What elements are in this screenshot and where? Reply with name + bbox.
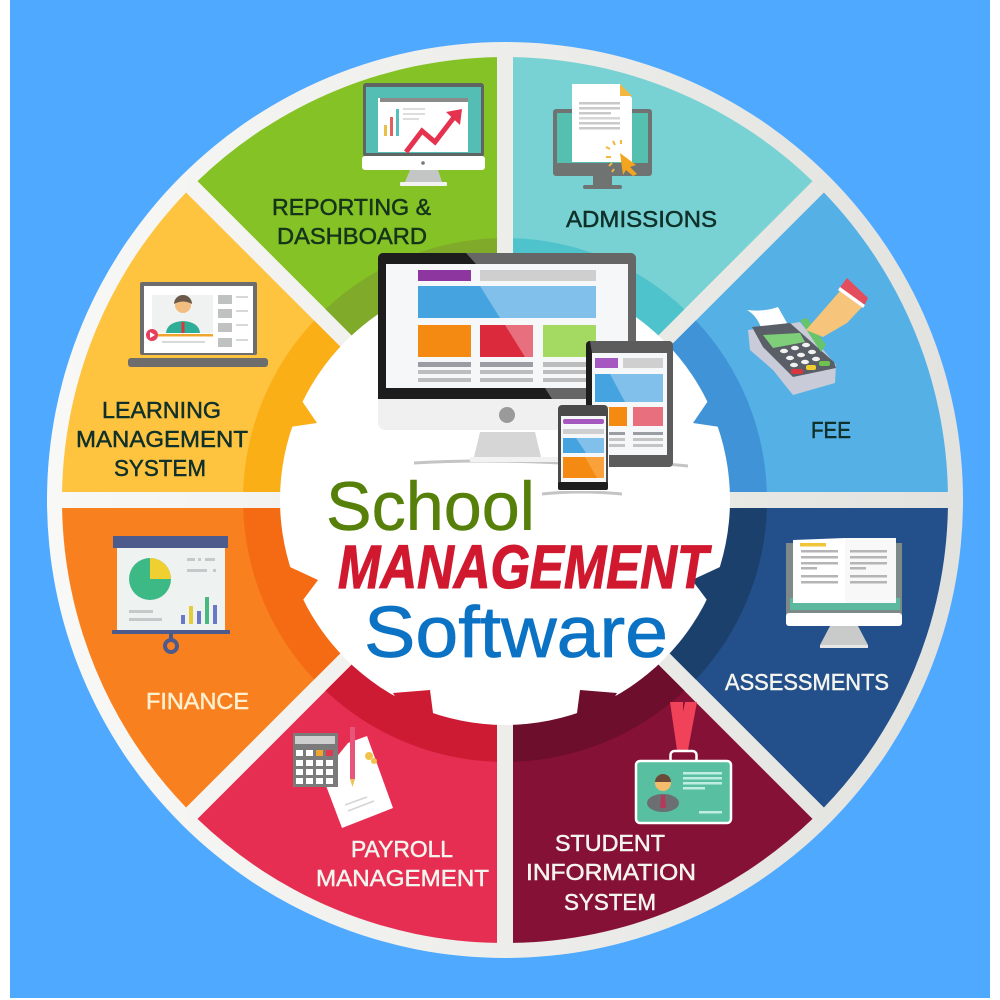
icon: ID card (636, 702, 731, 823)
icon: responsive devices (378, 253, 688, 494)
icon: admissions monitor and form (553, 84, 652, 189)
label: payroll management: PAYROLL (351, 836, 453, 862)
icon: reporting monitor (362, 83, 485, 186)
panel: finance (62, 508, 486, 808)
label: payroll management: MANAGEMENT (316, 865, 489, 891)
label: learning management system: LEARNING (102, 397, 221, 423)
icon: laptop video lesson (128, 282, 268, 367)
label: admissions: ADMISSIONS (566, 206, 717, 232)
label: fee: FEE (811, 417, 851, 443)
label: student information system: SYSTEM (564, 889, 656, 915)
label: reporting and dashboard: REPORTING & (272, 194, 431, 220)
label: payroll management (316, 836, 489, 891)
title line: School: School (326, 468, 535, 545)
panel: fee (524, 192, 948, 492)
centre gear (279, 274, 731, 726)
icon: payment terminal (747, 278, 868, 395)
panel: admissions (513, 57, 812, 481)
title (326, 468, 712, 673)
label: assessments: ASSESSMENTS (725, 669, 889, 695)
panel: payroll management (198, 519, 497, 943)
label: reporting and dashboard: DASHBOARD (277, 223, 427, 249)
title line: MANAGEMENT: MANAGEMENT (338, 533, 712, 601)
label: student information system: INFORMATION (526, 859, 696, 885)
panel: student information system (513, 519, 812, 943)
icon: calculator and paper (293, 727, 393, 828)
phone (558, 405, 609, 491)
panel: assessments (524, 508, 948, 808)
label: learning management system: SYSTEM (114, 455, 206, 481)
label: finance: FINANCE (146, 688, 249, 714)
shadow lines (414, 461, 688, 494)
panel: learning management system (62, 192, 486, 492)
title line: Software: Software (364, 593, 668, 673)
label: learning management system (76, 397, 248, 481)
icon: presentation board (112, 536, 230, 652)
panel: reporting and dashboard (198, 57, 497, 481)
label: student information system: STUDENT (555, 830, 665, 856)
label: reporting and dashboard (272, 194, 431, 249)
label: learning management system: MANAGEMENT (76, 426, 248, 452)
icon: book on monitor (786, 538, 902, 648)
tablet (586, 341, 673, 467)
label: student information system (526, 830, 696, 915)
desktop monitor (378, 253, 636, 462)
